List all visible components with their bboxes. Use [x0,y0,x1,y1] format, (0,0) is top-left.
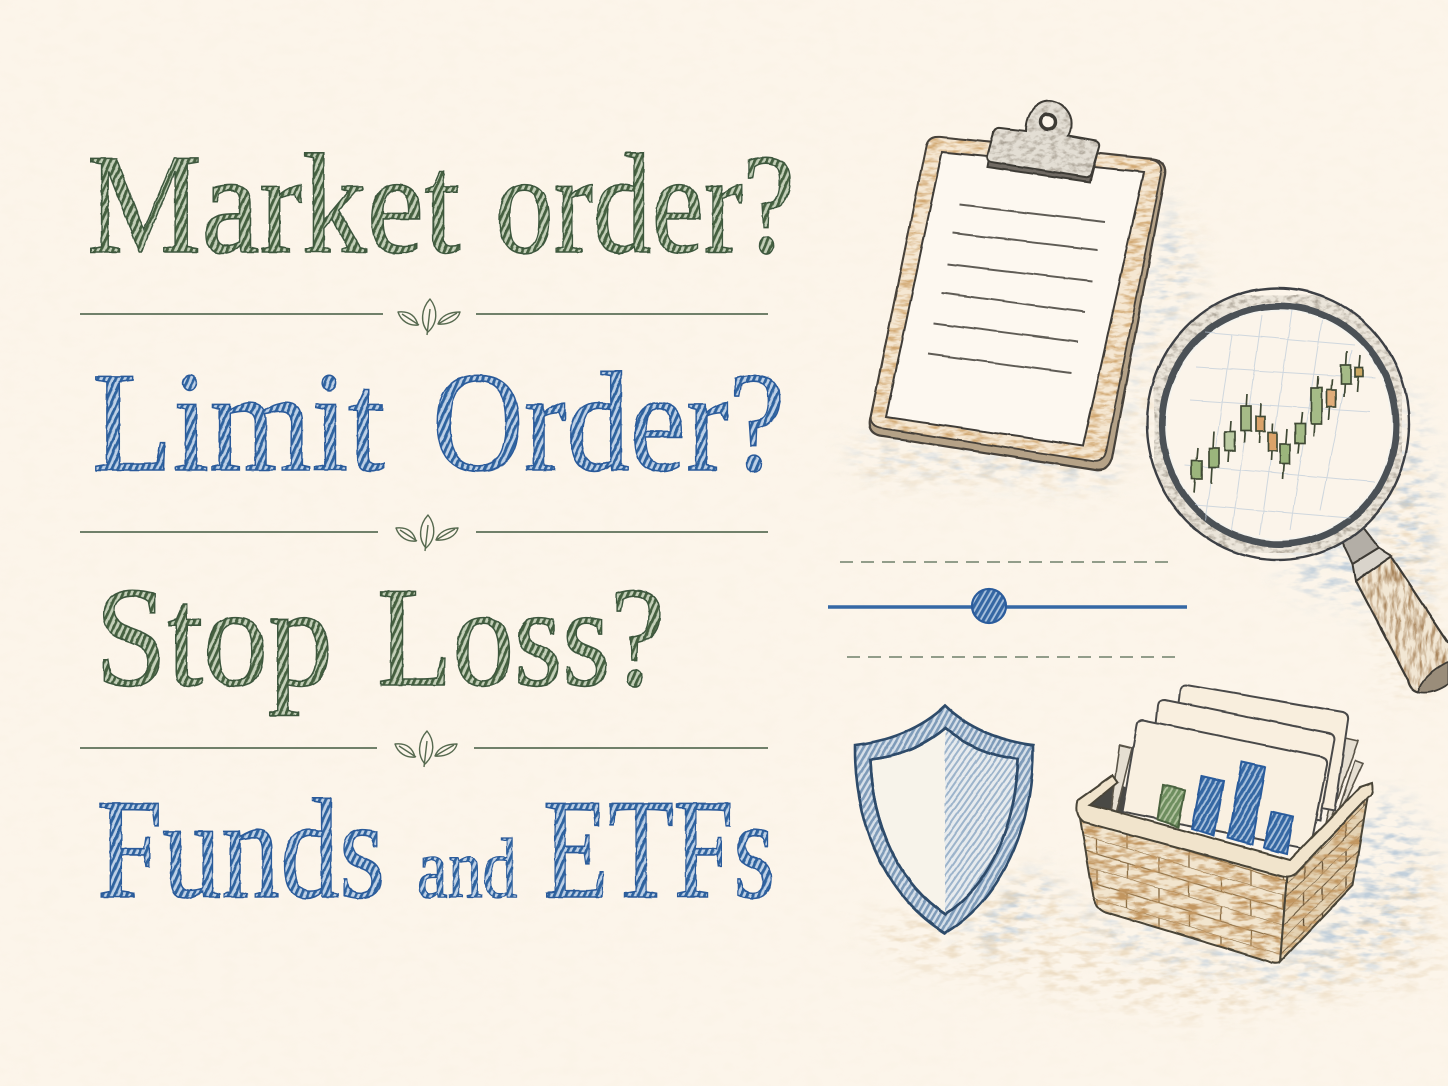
back card [1170,685,1348,810]
icon: basket of funds with bar chart cards [1077,685,1372,963]
title: Funds and ETFs [97,770,775,928]
icon: magnifying glass with candlestick chart [1147,288,1448,693]
slider: price levels [828,562,1187,657]
title: Market order?: order? [495,125,795,283]
divider with leaves 1 [80,299,768,335]
blue slider track [828,605,1187,609]
lens [1165,310,1393,540]
title: Stop Loss? [95,558,665,716]
slider knob [972,589,1006,623]
title: Market order? [87,125,795,283]
title: Funds and ETFs: Funds [97,770,385,928]
basket interior [1087,780,1150,815]
basket rim [1077,775,1372,877]
front card [1122,720,1327,850]
icon: clipboard [870,101,1165,470]
clipboard board [870,137,1165,470]
title: Limit Order?: Limit [92,343,385,501]
title: Stop Loss?: Stop [95,558,333,716]
title: Limit Order?: Order? [432,343,785,501]
divider with leaves 3 [80,731,768,767]
scribbled ground shading [850,190,1440,1020]
icon: shield [855,706,1033,933]
upper dashed line [840,561,1175,563]
middle card [1150,700,1334,820]
clipboard clip [987,101,1099,182]
title: Funds and ETFs: and [417,820,517,916]
title: Limit Order? [92,343,785,501]
basket front [1080,818,1287,963]
basket right side [1280,795,1368,962]
title: Stop Loss?: Loss? [377,558,665,716]
clipboard text lines [928,205,1105,373]
handle [1340,526,1448,693]
lower dashed line [847,656,1177,658]
chart grid [1185,310,1375,535]
clipboard paper [886,152,1144,446]
side cards [1111,745,1132,812]
title: Funds and ETFs: ETFs [543,770,775,928]
bar chart [1158,762,1293,854]
candlesticks [1192,351,1363,493]
divider with leaves 2 [80,515,768,551]
rim [1147,288,1409,560]
title: Market order?: Market [87,125,460,283]
